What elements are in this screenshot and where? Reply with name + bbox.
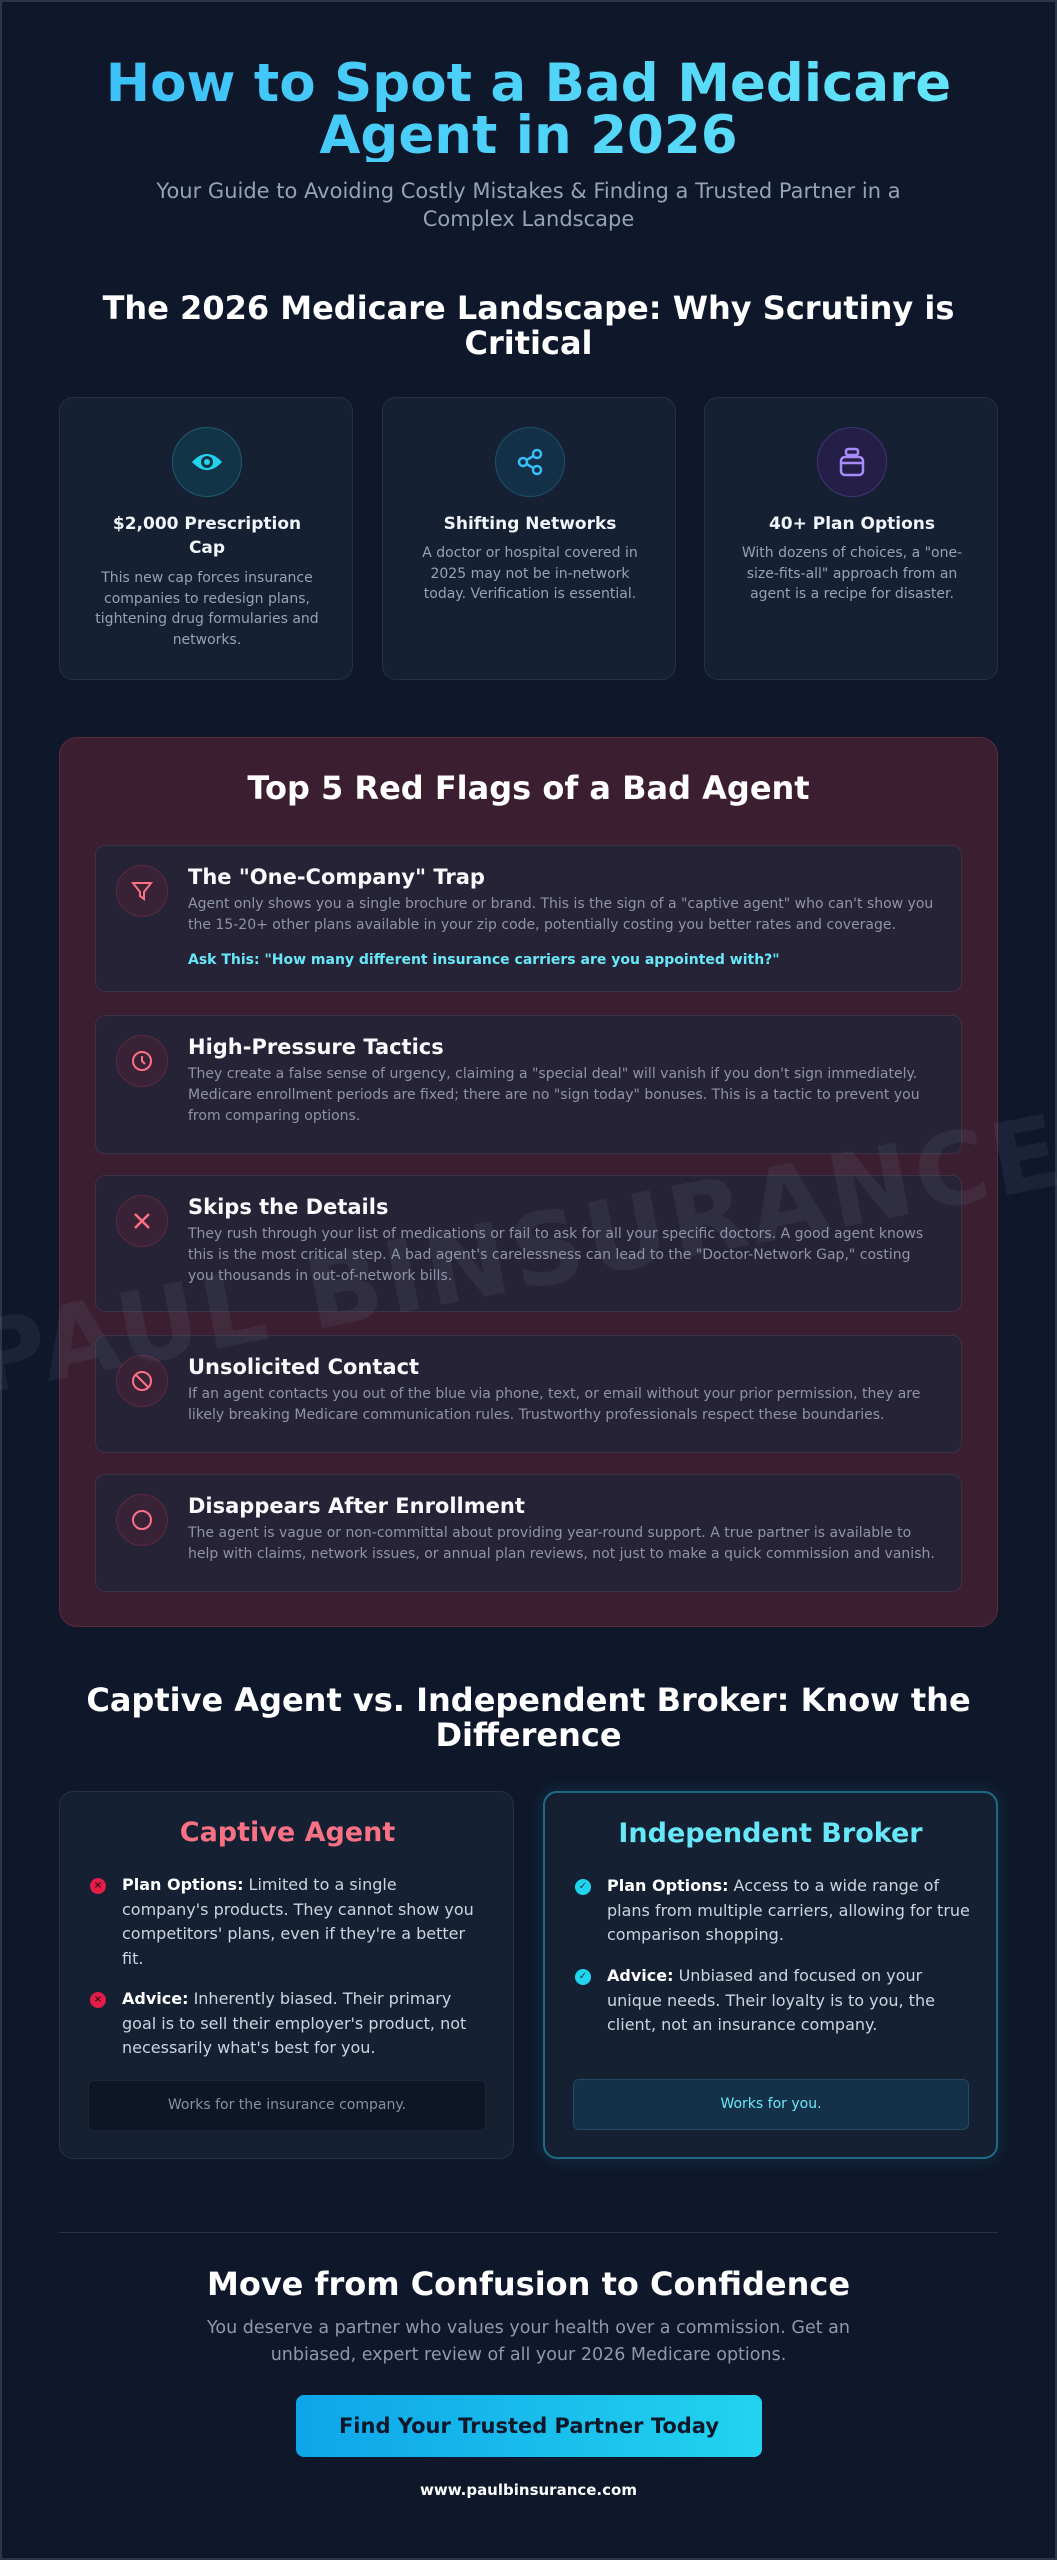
- flag 1: The "One-Company" Trap: [188, 865, 485, 889]
- footer: works for you: [573, 2079, 969, 2130]
- heading: cta: Move from Confusion to Confidence: [207, 2265, 850, 2303]
- flag 1: [95, 845, 962, 992]
- card: prescription cap: [59, 397, 353, 680]
- icon: share: [495, 427, 565, 497]
- bullet: plan options: Plan Options: Access to a wide range of plans from multiple carriers, allowing for true comparison shopping.: [607, 1876, 970, 1944]
- panel: independent broker: Independent Broker: [618, 1818, 923, 1849]
- panel: independent broker: [543, 1791, 998, 2159]
- card: plan options: [704, 397, 998, 680]
- footer: works for company: Works for the insurance company.: [168, 2097, 406, 2113]
- subtitle: Your Guide to Avoiding Costly Mistakes & Finding a Trusted Partner in a Complex Landscape: [156, 179, 901, 231]
- flag 2: [95, 1015, 962, 1154]
- icon: circle: [116, 1494, 168, 1546]
- flag 5: The agent is vague or non-committal about providing year-round support. A true partner is available to help with claims, network issues, or annual plan reviews, not just to make a quick commission and vanish.: [188, 1525, 935, 1562]
- panel: landscape cards: [59, 397, 998, 680]
- card: prescription cap: This new cap forces insurance companies to redesign plans, tightening drug formularies and networks.: [95, 570, 319, 648]
- panel: red flags: [59, 737, 998, 1627]
- flag 4: Unsolicited Contact: [188, 1355, 419, 1379]
- card: prescription cap: $2,000 Prescription Cap: [113, 514, 301, 558]
- title: How to Spot a Bad Medicare: [106, 53, 951, 114]
- panel: independent broker: ✓: [579, 1971, 587, 1982]
- flag 1: Agent only shows you a single brochure or brand. This is the sign of a "captive agent" who can't show you the 15-20+ other plans available in your zip code, potentially costing you better rates and coverage.: [188, 896, 933, 933]
- panel: captive agent: Captive Agent: [180, 1817, 395, 1848]
- panel: captive agent: ×: [94, 1880, 102, 1891]
- footer: works for you: Works for you.: [720, 2096, 822, 2112]
- icon: jar: [817, 427, 887, 497]
- heading: comparison: Captive Agent vs. Independent Broker: Know the Difference: [86, 1681, 971, 1754]
- title: [106, 53, 951, 166]
- icon: clock: [116, 1035, 168, 1087]
- panel: independent broker: ✓: [579, 1881, 587, 1892]
- cta text: You deserve a partner who values your health over a commission. Get an unbiased, expert review of all your 2026 Medicare options.: [207, 2318, 850, 2365]
- icon: ban: [116, 1355, 168, 1407]
- icon: x: [116, 1195, 168, 1247]
- bullet: plan options: Plan Options: Limited to a single company's products. They cannot show you competitors' plans, even if they're a better fit.: [122, 1875, 474, 1968]
- button: [296, 2395, 762, 2457]
- url: www.paulbinsurance.com: [420, 2481, 637, 2499]
- panel: captive agent: [59, 1791, 514, 2159]
- title: Agent in 2026: [319, 105, 738, 166]
- card: plan options: With dozens of choices, a "one-size-fits-all" approach from an agent is a recipe for disaster.: [742, 545, 962, 602]
- card: shifting networks: Shifting Networks: [444, 514, 616, 534]
- card: shifting networks: [382, 397, 676, 680]
- footer: works for company: [88, 2080, 486, 2131]
- flag 4: If an agent contacts you out of the blue via phone, text, or email without your prior permission, they are likely breaking Medicare communication rules. Trustworthy professionals respect these boundaries.: [188, 1386, 920, 1423]
- icon: funnel: [116, 865, 168, 917]
- bullet: advice: Advice: Inherently biased. Their primary goal is to sell their employer's product, not necessarily what's best for you.: [122, 1989, 466, 2057]
- flag 4: [95, 1335, 962, 1453]
- card: shifting networks: A doctor or hospital covered in 2025 may not be in-network today. Verification is essential.: [422, 545, 638, 602]
- panel: captive agent: ×: [94, 1994, 102, 2005]
- button: Find Your Trusted Partner Today: [339, 2414, 719, 2438]
- heading: red flags: Top 5 Red Flags of a Bad Agent: [247, 769, 810, 807]
- flag 3: Skips the Details: [188, 1195, 388, 1219]
- card: plan options: 40+ Plan Options: [769, 514, 935, 534]
- bullet: advice: Advice: Unbiased and focused on your unique needs. Their loyalty is to you, the client, not an insurance company.: [607, 1966, 935, 2034]
- flag 5: Disappears After Enrollment: [188, 1494, 525, 1518]
- heading: landscape: The 2026 Medicare Landscape: Why Scrutiny is Critical: [103, 289, 954, 362]
- flag 5: [95, 1474, 962, 1592]
- flag 2: They create a false sense of urgency, claiming a "special deal" will vanish if you don't sign immediately. Medicare enrollment periods are fixed; there are no "sign today" bonuses. This is a tactic to prevent you from comparing options.: [188, 1066, 920, 1124]
- flag 3: [95, 1175, 962, 1312]
- flag 3: They rush through your list of medications or fail to ask for all your specific doctors. A good agent knows this is the most critical step. A bad agent's carelessness can lead to the "Doctor-Network Gap," costing you thousands in out-of-network bills.: [188, 1226, 923, 1284]
- ask this: Ask This: "How many different insurance carriers are you appointed with?": [188, 952, 780, 968]
- icon: eye: [172, 427, 242, 497]
- flag 2: High-Pressure Tactics: [188, 1035, 444, 1059]
